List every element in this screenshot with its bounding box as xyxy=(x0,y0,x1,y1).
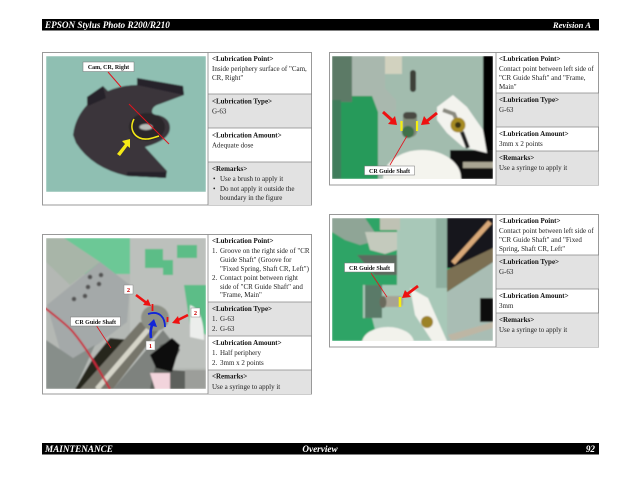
text: frame main contact details: Main" xyxy=(499,83,517,91)
header bar: Revision A xyxy=(552,20,591,30)
text: frame main contact details: <Lubrication Type> xyxy=(499,96,559,104)
text: groove lubrication details: Guide Shaft" (Groove for xyxy=(220,256,292,264)
text: groove lubrication details: 2. xyxy=(212,274,218,282)
photo: cam xyxy=(46,56,206,192)
label: number 2 right: 2 xyxy=(194,310,197,317)
text: cam lubrication details: Use a brush to apply it xyxy=(220,175,283,183)
label: Cam, CR, Right xyxy=(83,62,134,72)
text: cam lubrication details: CR, Right" xyxy=(212,74,243,82)
text: frame main contact details xyxy=(499,55,594,172)
text: frame main contact details: Contact point between left side of xyxy=(499,65,594,73)
label: number 1 xyxy=(146,341,155,350)
text: groove lubrication details: Use a syringe to apply it xyxy=(212,383,280,391)
text: groove lubrication details: <Remarks> xyxy=(212,372,247,380)
footer bar: Overview xyxy=(302,444,338,454)
text: frame main contact details: <Remarks> xyxy=(499,154,534,162)
label: Cam, CR, Right: Cam, CR, Right xyxy=(88,65,129,71)
label: CR Guide Shaft: CR Guide Shaft xyxy=(349,266,390,272)
label: CR Guide Shaft: CR Guide Shaft xyxy=(75,320,116,326)
blue arc and arrow, red marks and arrows xyxy=(148,313,165,327)
header bar: EPSON Stylus Photo R200/R210 xyxy=(44,20,170,30)
text: fixed spring lubrication details: 3mm xyxy=(499,302,514,310)
text: cam lubrication details: Inside periphery surface of "Cam, xyxy=(212,65,307,73)
red arrows and yellow marks xyxy=(383,112,393,121)
label: CR Guide Shaft: CR Guide Shaft xyxy=(369,169,410,175)
text: fixed spring lubrication details: Spring, Shaft CR, Left" xyxy=(499,245,565,253)
text: groove lubrication details: Groove on the right side of "CR xyxy=(220,247,310,255)
text: frame main contact details: G-63 xyxy=(499,106,514,114)
text: groove lubrication details: 1. xyxy=(212,315,218,323)
text: fixed spring lubrication details: Use a syringe to apply it xyxy=(499,326,567,334)
panel: fixed spring contact point xyxy=(330,214,599,359)
yellow arc and arrow xyxy=(132,119,159,139)
panel: cam lubrication xyxy=(42,52,312,205)
label: number 2 top: 2 xyxy=(127,287,130,294)
text: cam lubrication details: boundary in the figure xyxy=(220,194,282,202)
text: cam lubrication details: <Lubrication Type> xyxy=(212,98,272,106)
text: groove lubrication details: <Lubrication Type> xyxy=(212,305,272,313)
text: cam lubrication details: G-63 xyxy=(212,108,227,116)
text: cam lubrication details: <Lubrication Point> xyxy=(212,55,273,63)
footer bar: MAINTENANCE xyxy=(44,444,113,454)
text: cam lubrication details: • xyxy=(213,175,216,183)
text: fixed spring lubrication details xyxy=(499,217,594,334)
text: cam lubrication details xyxy=(212,55,307,202)
text: fixed spring lubrication details: G-63 xyxy=(499,268,514,276)
label: number 1: 1 xyxy=(149,343,152,350)
text: cam lubrication details: Adequate dose xyxy=(212,142,253,150)
text: cam lubrication details: <Remarks> xyxy=(212,165,247,173)
label: number 2 right xyxy=(191,308,200,317)
label: number 2 top xyxy=(124,285,133,294)
text: fixed spring lubrication details: <Lubrication Point> xyxy=(499,217,560,225)
footer bar xyxy=(42,443,599,454)
text: groove lubrication details: 3mm x 2 points xyxy=(220,359,264,367)
text: fixed spring lubrication details: <Lubrication Type> xyxy=(499,258,559,266)
text: fixed spring lubrication details: Contact point between left side of xyxy=(499,227,594,235)
text: groove lubrication details: 2. xyxy=(212,359,218,367)
label: CR Guide Shaft xyxy=(70,317,120,326)
text: frame main contact details: Use a syringe to apply it xyxy=(499,164,567,172)
text: groove lubrication details: G-63 xyxy=(220,315,235,323)
text: groove lubrication details: G-63 xyxy=(220,325,235,333)
text: groove lubrication details: 1. xyxy=(212,247,218,255)
photo: shaft left side xyxy=(332,218,493,341)
text: cam lubrication details: <Lubrication Amount> xyxy=(212,132,282,140)
text: groove lubrication details: <Lubrication Point> xyxy=(212,237,273,245)
text: groove lubrication details: Half periphery xyxy=(220,349,262,357)
text: cam lubrication details: Do not apply it outside the xyxy=(220,185,294,193)
text: groove lubrication details: "Fixed Spring, Shaft CR, Left") xyxy=(220,265,310,273)
text: cam lubrication details: • xyxy=(213,185,216,193)
panel: groove and contact point xyxy=(42,234,312,394)
header bar xyxy=(42,19,599,30)
text: fixed spring lubrication details: <Lubrication Amount> xyxy=(499,292,569,300)
text: groove lubrication details: 1. xyxy=(212,349,218,357)
label: CR Guide Shaft xyxy=(344,263,394,272)
text: frame main contact details: <Lubrication Point> xyxy=(499,55,560,63)
label: CR Guide Shaft xyxy=(364,166,414,175)
text: fixed spring lubrication details: <Remarks> xyxy=(499,316,534,324)
panel: frame main contact point xyxy=(329,52,599,186)
text: fixed spring lubrication details: "CR Guide Shaft" and "Fixed xyxy=(499,236,582,244)
text: groove lubrication details: <Lubrication Amount> xyxy=(212,339,282,347)
text: groove lubrication details: 2. xyxy=(212,325,218,333)
red pointer and line xyxy=(108,72,169,144)
photo: shaft assembly xyxy=(45,238,206,389)
yellow mark, red arrow and pointer xyxy=(399,297,401,307)
text: frame main contact details: 3mm x 2 points xyxy=(499,140,543,148)
footer bar: 92 xyxy=(586,444,595,454)
text: frame main contact details: "CR Guide Shaft" and "Frame, xyxy=(499,74,586,82)
text: groove lubrication details: side of "CR Guide Shaft" and xyxy=(220,283,303,291)
text: groove lubrication details: Contact point between right xyxy=(220,274,298,282)
text: frame main contact details: <Lubrication Amount> xyxy=(499,130,569,138)
text: groove lubrication details: "Frame, Main" xyxy=(220,291,262,299)
text: groove lubrication details xyxy=(212,237,310,391)
photo: shaft and frame xyxy=(332,56,493,179)
